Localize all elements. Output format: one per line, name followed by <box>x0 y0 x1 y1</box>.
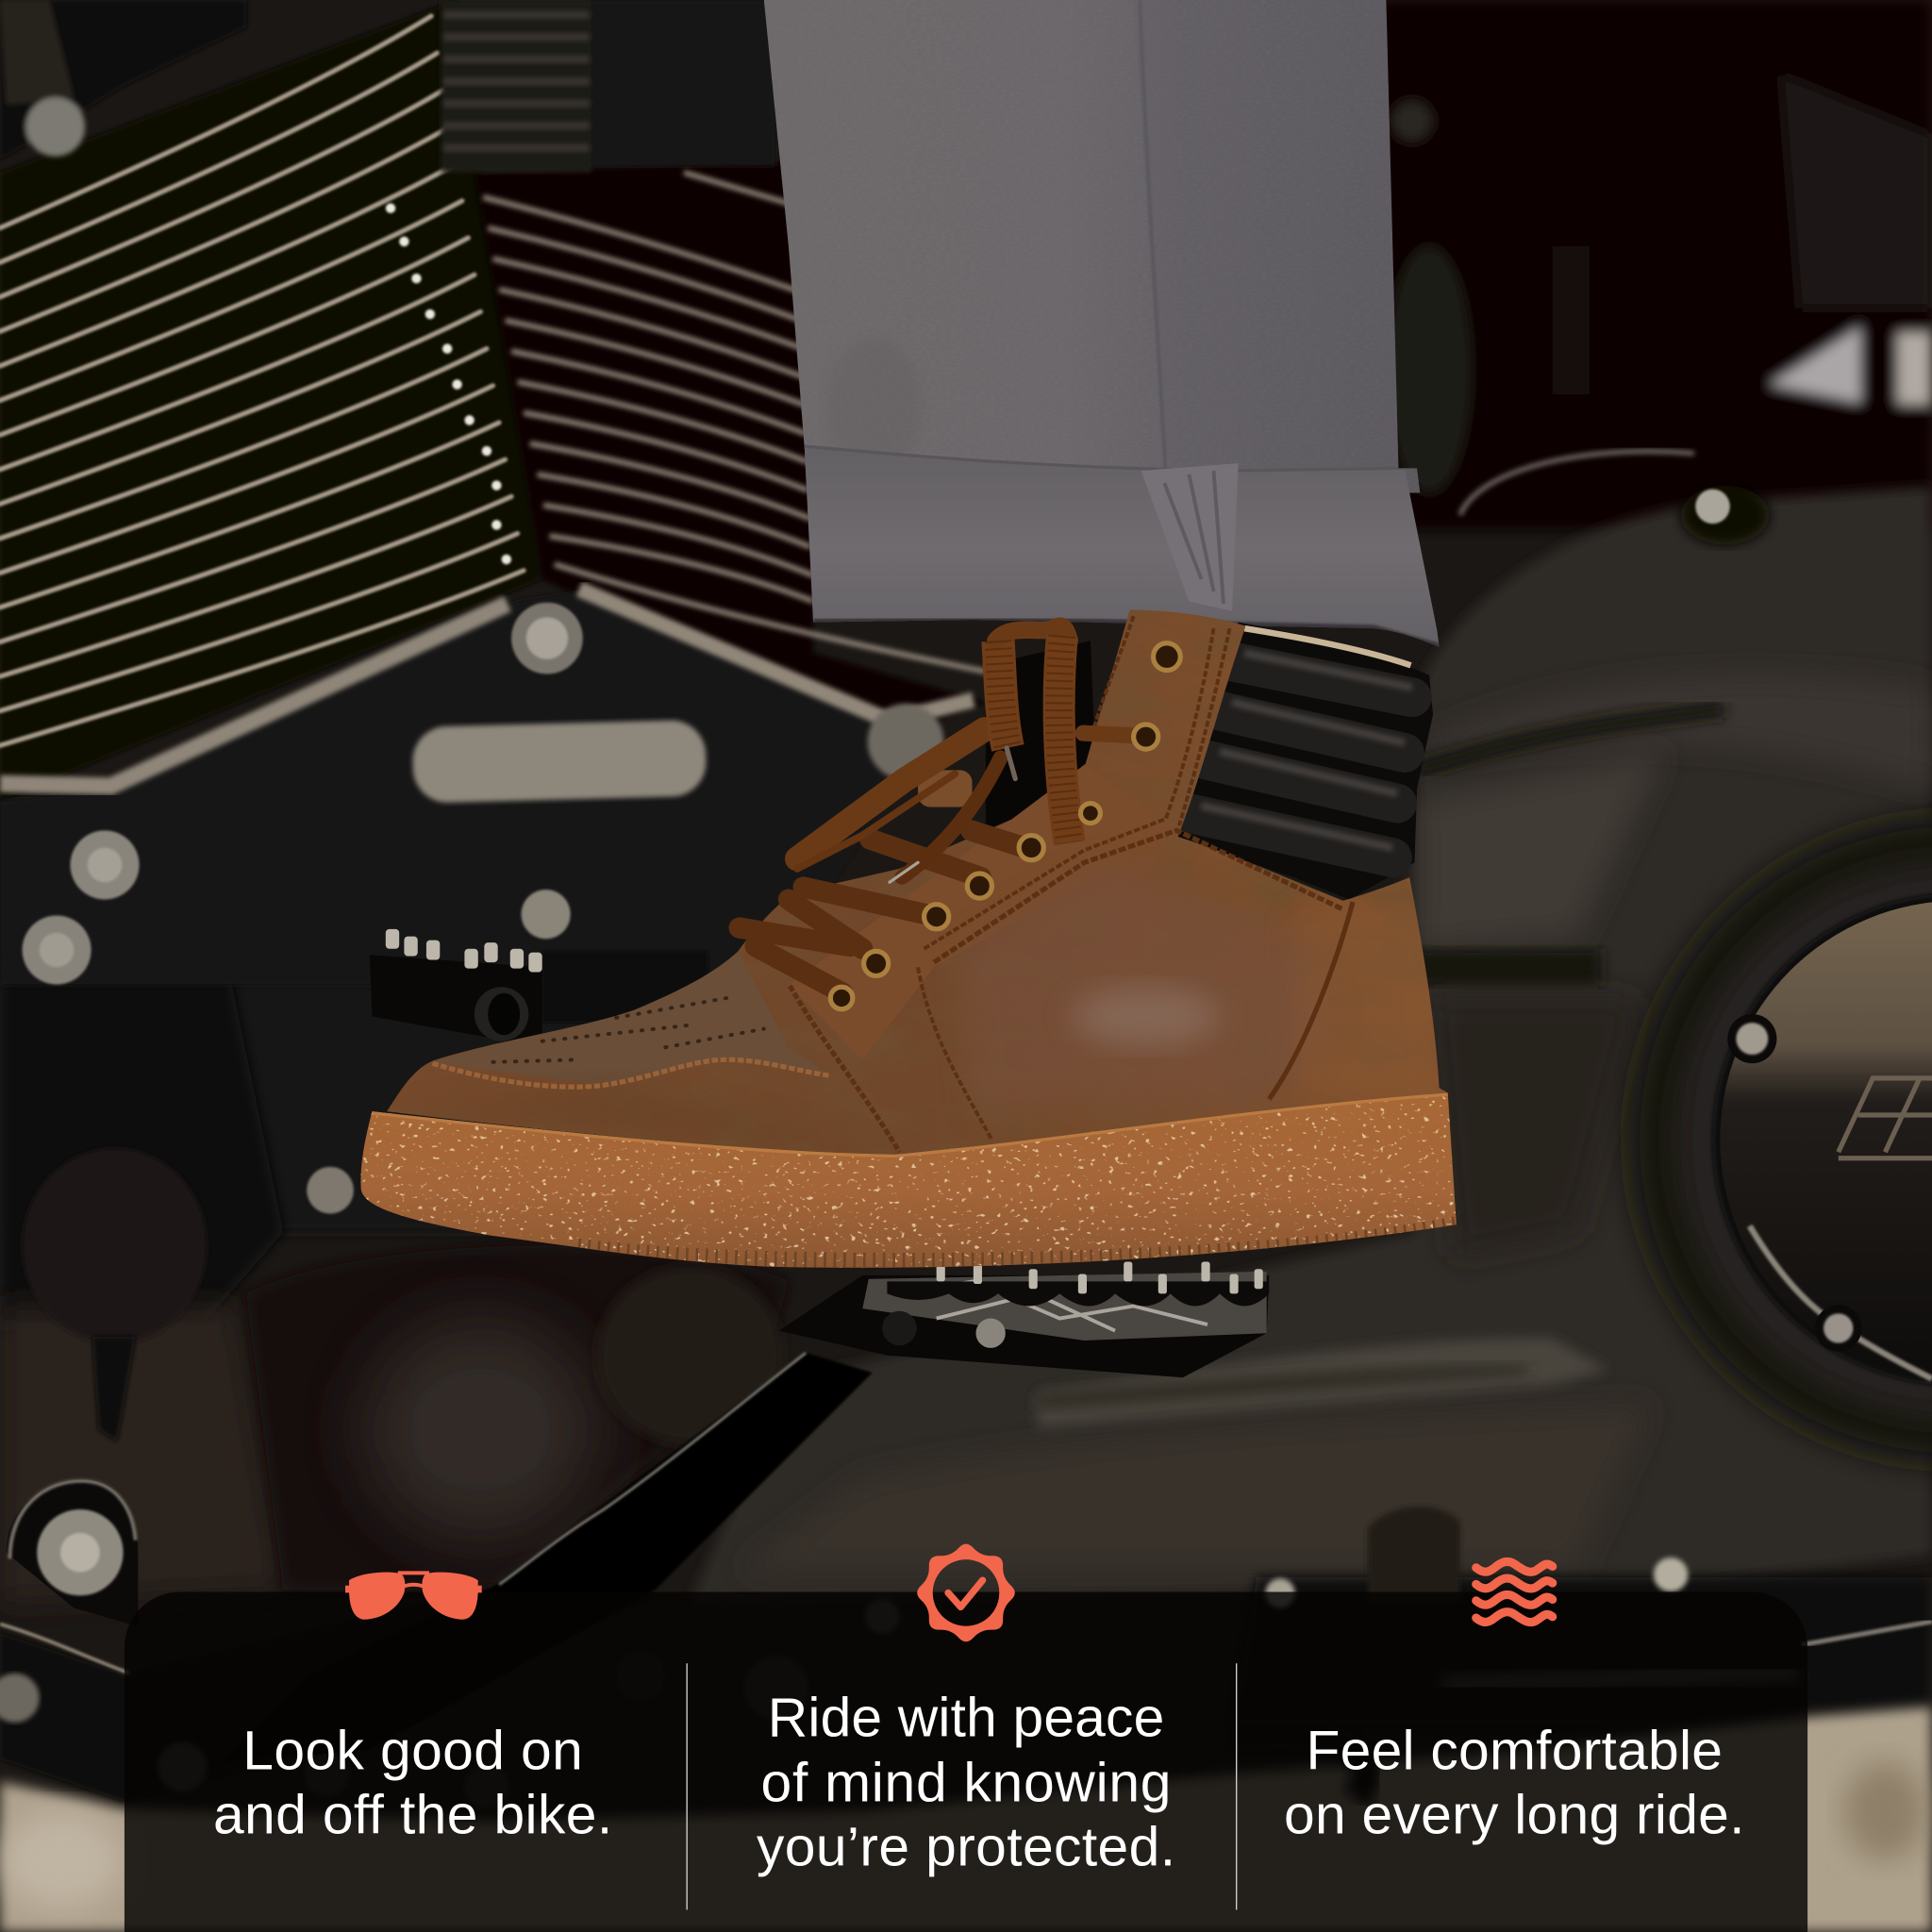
text block: comfort: on every long ride. <box>1284 1785 1744 1846</box>
eyelets <box>830 643 1180 1009</box>
kickstand and lower bolts <box>865 1507 1688 1634</box>
upper right dark frame <box>1356 0 1932 530</box>
right cylinder bank fins <box>475 160 986 740</box>
ground <box>0 1707 1932 1932</box>
engine tag plate <box>412 720 707 804</box>
padded collar <box>1176 623 1433 899</box>
trouser cuff <box>801 446 1441 653</box>
stitching and seams <box>432 616 1353 1152</box>
clutch cover <box>1630 817 1932 1462</box>
bolt bracket <box>7 1478 138 1626</box>
text block: look good: Look good on <box>242 1721 583 1782</box>
text block: peace of mind <box>757 1687 1175 1877</box>
top left engine blocks <box>0 0 776 173</box>
wiring and casing bolt <box>1460 451 1770 544</box>
shift peg <box>370 929 708 1047</box>
leather upper <box>370 591 1466 1171</box>
work boot <box>351 591 1466 1275</box>
text block: comfort <box>1284 1721 1744 1846</box>
boot laces <box>740 626 1136 993</box>
brake footpeg <box>778 1261 1269 1377</box>
text block: peace of mind: Ride with peace <box>768 1687 1164 1748</box>
crepe sole <box>351 1084 1466 1275</box>
engine casing <box>690 487 1932 1725</box>
divider right <box>1236 1663 1237 1909</box>
text block: look good: and off the bike. <box>213 1785 612 1846</box>
bike lower frame <box>0 1590 1799 1808</box>
left cylinder bank fins <box>0 0 542 801</box>
text block: comfort: Feel comfortable <box>1306 1721 1723 1782</box>
trouser leg with cuff <box>752 0 1454 653</box>
tongue shadow <box>986 641 1096 832</box>
icon: safety badge with check <box>917 1544 1015 1641</box>
text block: look good <box>213 1721 612 1846</box>
brake pedal arm <box>222 1353 873 1762</box>
text block: peace of mind: you’re protected. <box>757 1816 1175 1877</box>
text block: peace of mind: of mind knowing <box>761 1753 1171 1814</box>
large crank case <box>0 801 789 1602</box>
panel: benefits overlay <box>125 1592 1807 1932</box>
icon: comfort waves <box>1476 1561 1553 1623</box>
icon: aviator sunglasses <box>345 1571 482 1620</box>
perforated suede vamp <box>432 951 830 1086</box>
cylinder base bars, bolts and tag <box>0 589 974 1214</box>
divider left <box>687 1663 688 1909</box>
